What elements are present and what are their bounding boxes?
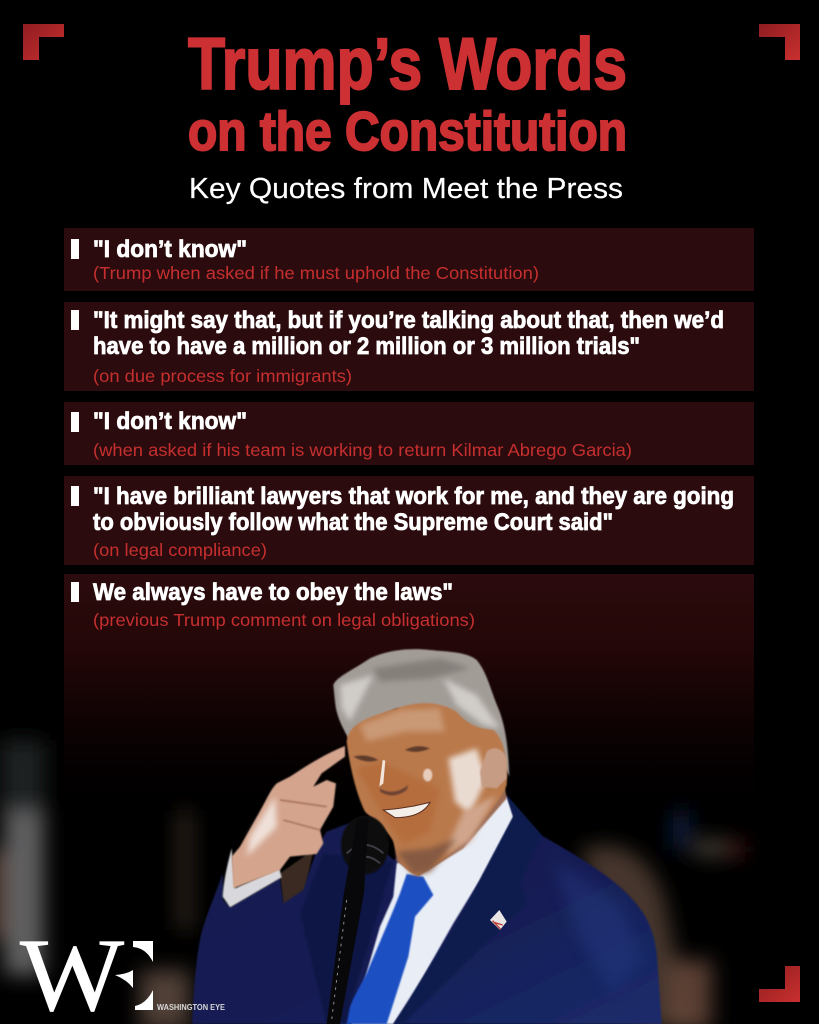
face [347,703,507,875]
panel: quote 4: "I have brilliant lawyers that work for me, and they are going [93,483,734,510]
panel: quote 2: (on due process for immigrants) [93,366,352,386]
lower jaw pale [443,795,497,855]
finger creases [280,800,327,830]
hand [232,746,345,888]
corner bracket: top right [759,24,800,60]
cheek shine [423,769,432,781]
suit jacket [192,795,662,1024]
panel: quote 1 [64,228,754,291]
inner left lapel [300,853,393,1024]
panel: quote 5: (previous Trump comment on legal obligations) [93,610,475,630]
hand highlight [247,797,277,857]
smile [383,802,430,818]
shoulder highlight [553,860,643,993]
title [188,24,627,162]
blurred crowd background [0,740,744,1024]
hair base [333,649,509,777]
panel: quote 3: (when asked if his team is working to return Kilmar Abrego Garcia) [93,440,632,460]
photo: Trump at microphone [192,649,662,1024]
flag pin [490,910,507,930]
panel: quote 5 [64,574,754,824]
panel: quote 4 [64,476,754,565]
neck [393,778,507,877]
panel: quote 5: We always have to obey the laws" [93,579,453,606]
jaw shadow [397,838,457,875]
microphone [327,816,389,1024]
tie [340,874,433,1024]
panel: quote 2 [64,302,754,391]
eyes [353,746,430,762]
panel: quote 3 [64,402,754,465]
corner bracket: top left [23,24,64,60]
jacket lapel [393,795,542,1024]
panel: quote 2: "It might say that, but if you’re talking about that, then we’d [93,307,724,334]
forehead tone [360,708,445,742]
temple and cheek highlight [448,748,487,815]
nose highlight [379,760,385,787]
cheek orange [357,762,440,845]
head in zoom coordinates [333,649,509,877]
hair highlights [340,675,500,728]
corner bracket: bottom right [759,966,800,1002]
panel: quote 1: "I don’t know" [93,236,247,263]
panel: quote 4: (on legal compliance) [93,540,267,560]
shirt collar and front [352,797,513,1024]
subtitle: Key Quotes from Meet the Press [189,173,623,205]
logo: Washington Eye: WASHINGTON EYE [157,1003,226,1012]
title: on the Constitution [188,100,627,162]
panel: quote 1: (Trump when asked if he must uphold the Constitution) [93,263,539,283]
ear [480,748,507,788]
panel: quote 4: to obviously follow what the Supreme Court said" [93,509,613,536]
title: Trump’s Words [188,24,627,105]
nose shadow [380,785,408,795]
panel: quote 2: have to have a million or 2 million or 3 million trials" [93,333,640,360]
logo: Washington Eye [20,918,226,1024]
gap between arm and torso [280,850,313,905]
shirt cuff [223,848,282,907]
hair shadow [373,658,470,682]
panel: quote 3: "I don’t know" [93,408,247,435]
